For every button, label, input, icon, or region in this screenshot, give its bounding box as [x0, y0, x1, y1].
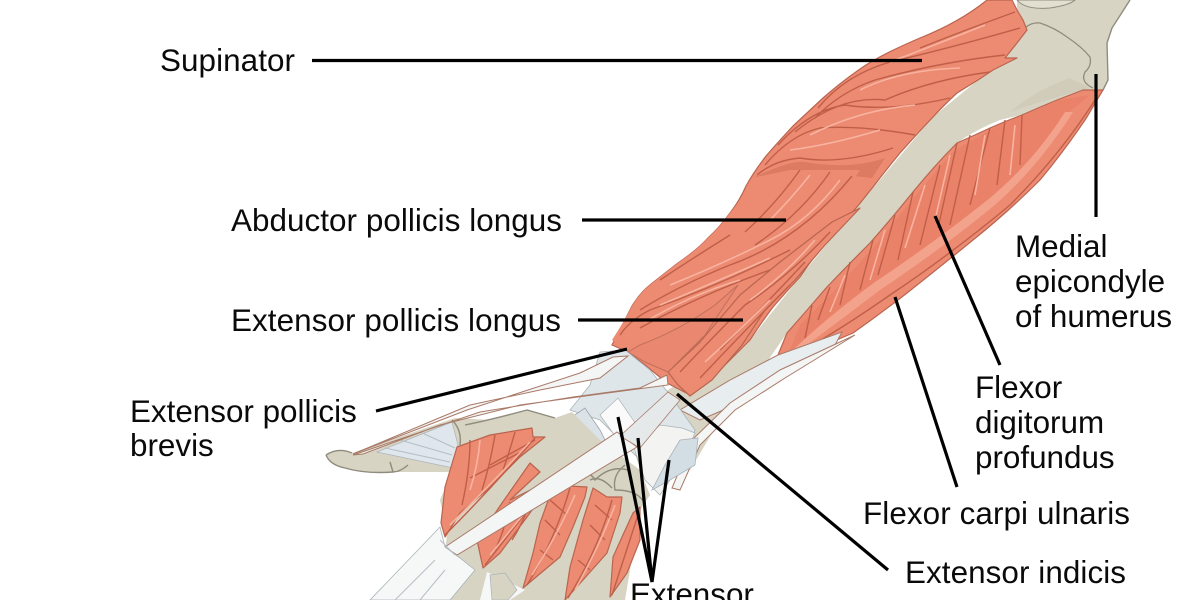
- muscle: extensor pollicis longus: [628, 208, 860, 396]
- label: flexor carpi ulnaris: Flexor carpi ulnaris: [863, 496, 1130, 531]
- leader line: abductor pollicis longus: [582, 218, 786, 222]
- label: extensor pollicis brevis: brevis: [130, 428, 214, 463]
- label: medial epicondyle of humerus: Medial: [1015, 229, 1107, 264]
- leader line: medial epicondyle: [1094, 74, 1098, 217]
- label: extensor pollicis brevis: Extensor pollicis: [130, 394, 357, 429]
- label: flexor digitorum profundus: profundus: [975, 440, 1115, 475]
- leader line: extensor pollicis brevis: [376, 349, 627, 411]
- label: extensor pollicis longus: Extensor pollicis longus: [231, 303, 561, 338]
- muscle: hand interosseous second: [477, 463, 555, 568]
- leader line: flexor carpi ulnaris: [895, 297, 957, 487]
- muscle: hand interosseous first: [441, 428, 545, 537]
- muscle: hand interosseous fourth: [565, 488, 622, 600]
- leader line: extensor pollicis longus: [578, 318, 743, 322]
- muscle: supinator and upper extensor mass: [612, 0, 1027, 395]
- leader lines: extensor digitorum: [618, 417, 669, 582]
- muscle: hand interosseous fifth: [610, 507, 640, 597]
- muscle: flexor digitorum profundus and flexor carpi ulnaris: [778, 90, 1103, 362]
- label: flexor digitorum profundus: digitorum: [975, 405, 1104, 440]
- muscle: hand interosseous third: [523, 477, 587, 588]
- hand bones: thumb, metacarpals and carpals: [326, 410, 650, 600]
- leader line: flexor digitorum profundus: [935, 216, 1000, 365]
- label: medial epicondyle of humerus: epicondyle: [1015, 264, 1165, 299]
- label: abductor pollicis longus: Abductor pollicis longus: [231, 203, 562, 238]
- leader line: extensor indicis: [677, 394, 888, 570]
- label: flexor digitorum profundus: Flexor: [975, 370, 1062, 405]
- muscle: abductor pollicis longus: [612, 170, 860, 345]
- label: supinator: Supinator: [160, 43, 295, 78]
- finger tendons at lower left: [370, 527, 525, 600]
- tendons: extensor digiti to index finger: [445, 392, 680, 555]
- label: extensor indicis: Extensor indicis: [905, 555, 1126, 590]
- leader line: supinator: [312, 59, 922, 62]
- label: medial epicondyle of humerus: of humerus: [1015, 299, 1172, 334]
- forearm bones: humerus, radius and ulna: [625, 0, 1130, 470]
- tendons: thumb extensors: [353, 356, 668, 455]
- wrist tendons and ligaments: [545, 332, 855, 495]
